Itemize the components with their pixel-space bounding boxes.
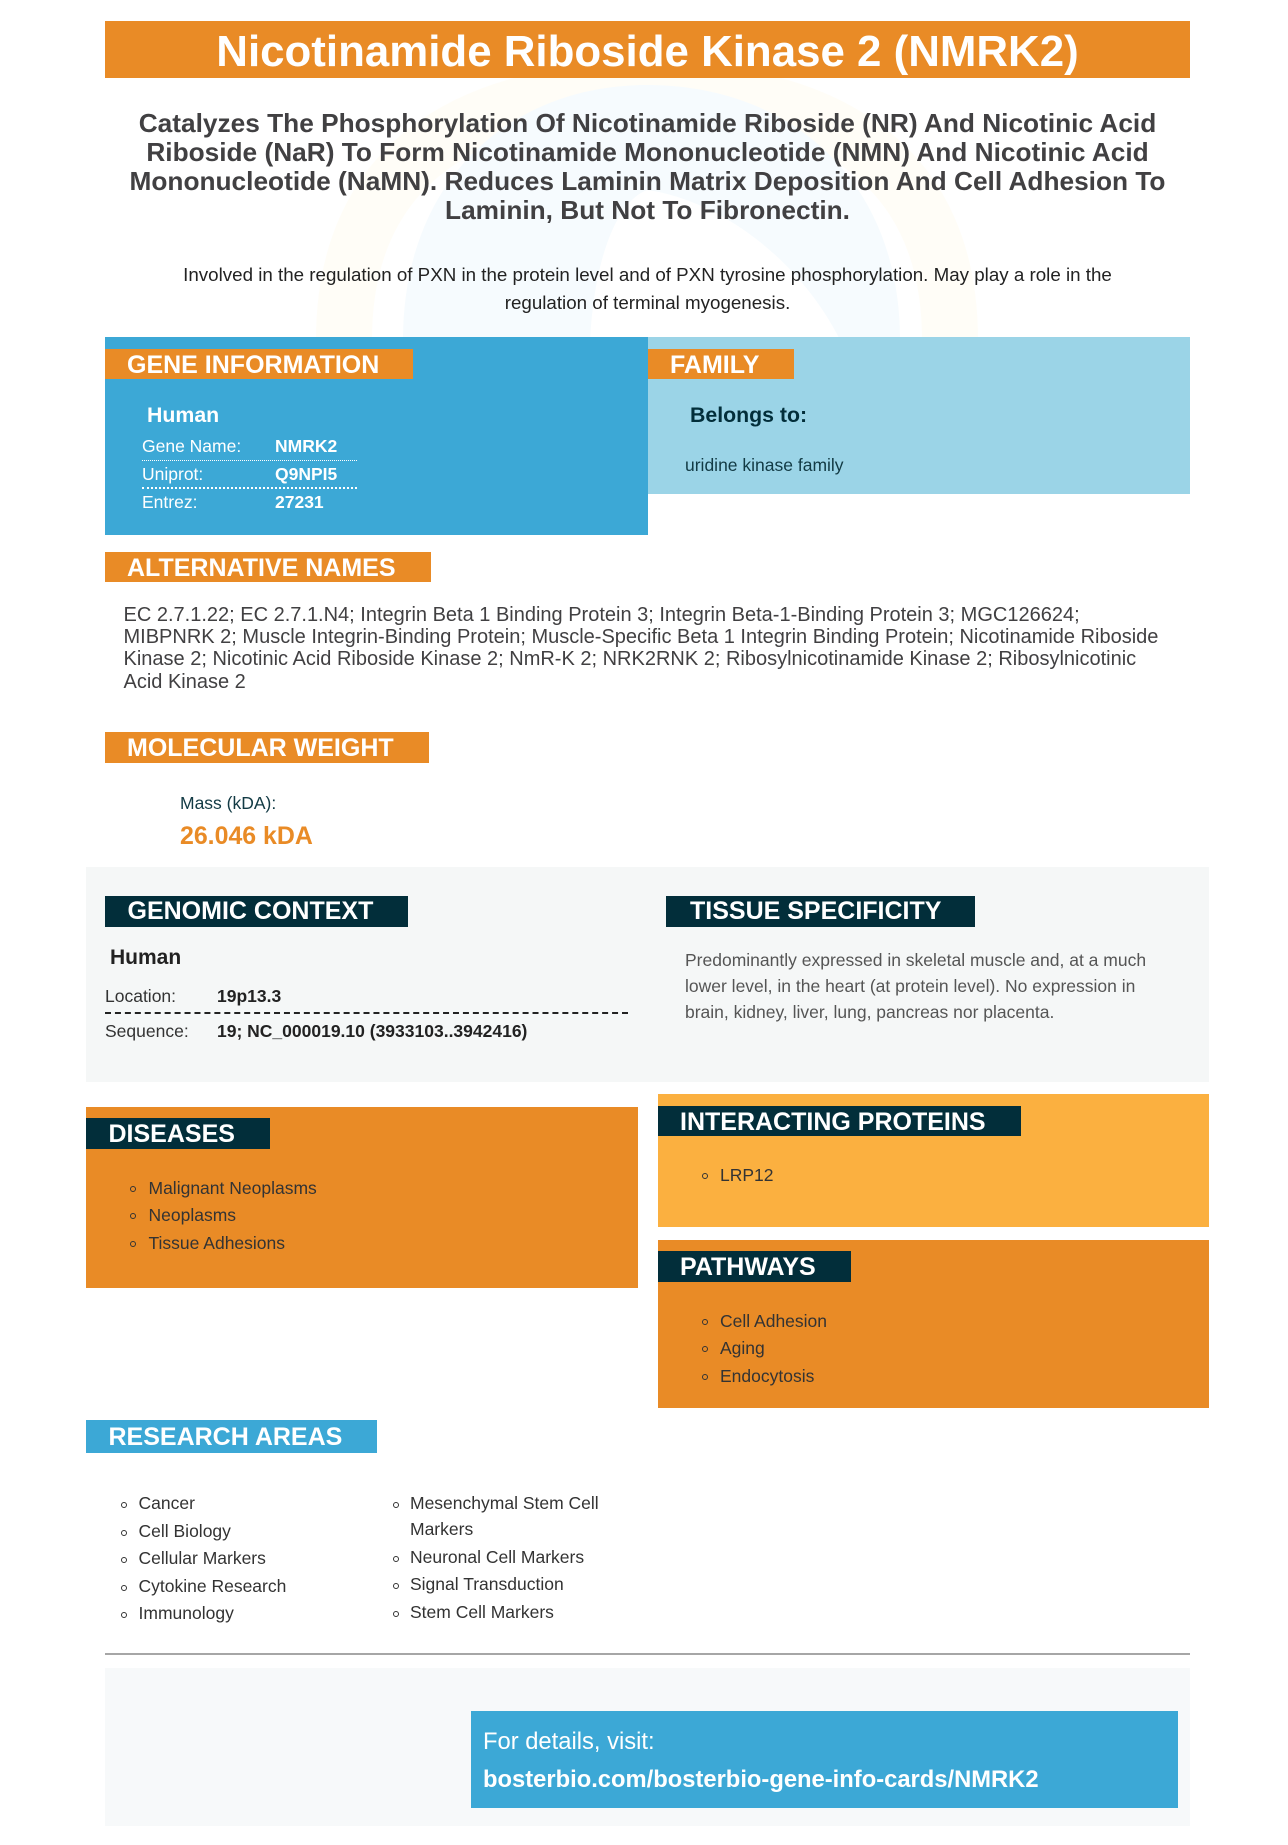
title banner: Nicotinamide Riboside Kinase 2 (NMRK2) [216,27,1079,76]
interacting proteins list: LRP12 [720,1165,774,1185]
pathways list: Aging [720,1338,765,1358]
gene details table: Uniprot: [142,464,203,484]
family value: uridine kinase family [685,455,844,475]
heading: interacting proteins: INTERACTING PROTEINS [680,1108,986,1136]
alternative names text [124,604,1158,693]
gene details table: NMRK2 [275,436,337,456]
heading: molecular weight: MOLECULAR WEIGHT [127,734,394,762]
pathways list: Cell Adhesion [720,1311,827,1331]
gene details table: Q9NPI5 [275,464,337,484]
callout url: bosterbio.com/bosterbio-gene-info-cards/NMRK2 [483,1766,1039,1793]
gene details table [142,436,357,512]
diseases list [130,1178,317,1253]
heading: genomic context: GENOMIC CONTEXT [128,897,373,925]
heading: family: FAMILY [670,351,759,379]
species label: Human [147,403,219,427]
dashed divider [105,1012,628,1014]
callout label: For details, visit: [483,1728,655,1755]
tissue specificity text: Predominantly expressed in skeletal muscle and, at a much [685,950,1146,970]
gene details table: Entrez: [142,492,197,512]
location row: 19p13.3 [217,986,281,1006]
panel: genomic context and tissue specificity [86,867,1209,1082]
alternative names text: Kinase 2; Nicotinic Acid Riboside Kinase 2; NmR-K 2; NRK2RNK 2; Ribosylnicotinamide Kinase 2; Ribosylnicotinic [124,648,1136,670]
research areas list: column 2: Markers [410,1519,473,1539]
heading: family [648,349,794,379]
mass label: Mass (kDA): [180,793,276,813]
heading: diseases: DISEASES [108,1120,235,1148]
research areas list: column 2: Stem Cell Markers [410,1602,554,1622]
intro text: regulation of terminal myogenesis. [505,292,790,313]
pathways list: Endocytosis [720,1366,814,1386]
research areas list: column 2 [393,1493,599,1622]
callout: details link [471,1711,1178,1808]
tissue specificity text [685,950,1146,1022]
subtitle: Riboside (NaR) To Form Nicotinamide Mononucleotide (NMN) And Nicotinic Acid [146,137,1149,167]
gene details table: Gene Name: [142,436,241,456]
heading: research areas: RESEARCH AREAS [108,1423,342,1451]
research areas list: column 1: Immunology [138,1603,234,1623]
research areas list: column 1: Cell Biology [138,1521,231,1541]
subtitle [130,108,1165,225]
panel: gene information [105,337,648,535]
research areas list: column 1 [121,1493,286,1623]
sequence row: 19; NC_000019.10 (3933103..3942416) [217,1021,527,1041]
tissue specificity text: lower level, in the heart (at protein level). No expression in [685,976,1135,996]
diseases list: Neoplasms [148,1205,236,1225]
heading: diseases [86,1118,270,1149]
heading: tissue specificity: TISSUE SPECIFICITY [690,897,941,925]
alternative names text: Acid Kinase 2 [124,671,246,693]
research areas list: column 1: Cytokine Research [138,1576,286,1596]
diseases list: Tissue Adhesions [148,1233,285,1253]
research areas list: column 2: Mesenchymal Stem Cell [410,1493,599,1513]
heading: research areas [86,1420,377,1453]
research areas list: column 1: Cancer [138,1493,195,1513]
research areas list: column 2: Neuronal Cell Markers [410,1547,584,1567]
heading: alternative names: ALTERNATIVE NAMES [127,554,396,582]
subtitle: Mononucleotide (NaMN). Reduces Laminin Matrix Deposition And Cell Adhesion To [130,166,1165,196]
sequence row: Sequence: [105,1021,189,1041]
tissue specificity text: brain, kidney, liver, lung, pancreas nor placenta. [685,1002,1054,1022]
panel: footer [105,1668,1190,1826]
belongs to label: Belongs to: [690,403,807,427]
intro text: Involved in the regulation of PXN in the protein level and of PXN tyrosine phosphorylation. May play a role in the [183,264,1112,285]
panel: interacting proteins [658,1094,1209,1227]
heading: pathways [658,1251,851,1282]
heading: pathways: PATHWAYS [680,1253,816,1281]
intro text [183,264,1112,313]
alternative names text: MIBPNRK 2; Muscle Integrin-Binding Protein; Muscle-Specific Beta 1 Integrin Binding Protein; Nicotinamide Riboside [124,626,1158,648]
location row: Location: [105,986,176,1006]
research areas list: column 1: Cellular Markers [138,1548,266,1568]
diseases list: Malignant Neoplasms [148,1178,317,1198]
alternative names text: EC 2.7.1.22; EC 2.7.1.N4; Integrin Beta 1 Binding Protein 3; Integrin Beta-1-Binding Protein 3; MGC126624; [124,604,1080,626]
research areas list: column 2: Signal Transduction [410,1574,564,1594]
panel: diseases [86,1107,638,1288]
panel: pathways [658,1240,1209,1408]
heading: gene information: GENE INFORMATION [127,351,379,379]
species label: Human [110,946,181,969]
subtitle: Catalyzes The Phosphorylation Of Nicotinamide Riboside (NR) And Nicotinic Acid [139,108,1156,138]
pathways list [702,1311,827,1386]
background watermark [403,85,900,337]
location row [105,986,281,1006]
mass value: 26.046 kDA [180,822,313,850]
panel: family [648,337,1190,494]
subtitle: Laminin, But Not To Fibronectin. [445,195,850,225]
gene details table: 27231 [275,492,324,512]
title banner [105,21,1190,78]
